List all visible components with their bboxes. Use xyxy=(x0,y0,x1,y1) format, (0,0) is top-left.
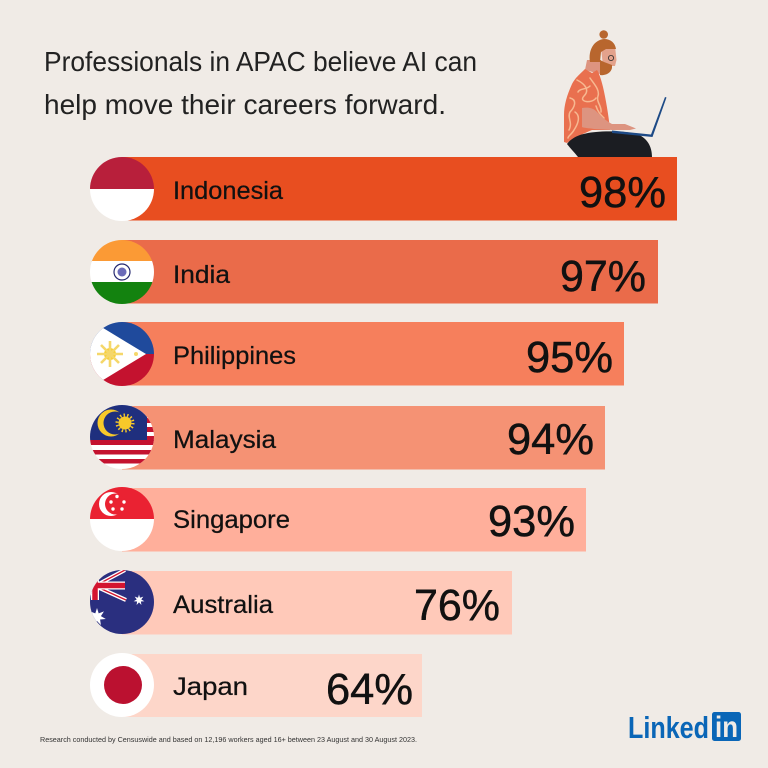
flag: India xyxy=(90,240,154,304)
shirt xyxy=(564,69,610,143)
bar: Australia: Australia xyxy=(173,591,273,619)
bar: Japan: Japan xyxy=(173,673,248,701)
bar: Singapore: 93% xyxy=(488,497,575,546)
legs xyxy=(567,131,652,157)
footnote: Research conducted by Censuswide and based on 12,196 workers aged 16+ between 23 August and 30 August 2023. xyxy=(40,735,417,744)
bar: Japan: 64% xyxy=(326,665,413,714)
bar: Indonesia xyxy=(90,157,677,221)
logo: LinkedIn: in xyxy=(715,711,738,744)
bar: Australia xyxy=(88,570,512,634)
flag: Singapore xyxy=(90,487,154,552)
title: help move their careers forward. xyxy=(44,89,446,120)
hair bun xyxy=(599,30,608,39)
bar: Philippines: 95% xyxy=(526,333,613,382)
arm xyxy=(582,108,636,130)
bar: India xyxy=(90,240,658,304)
glasses xyxy=(608,55,614,61)
bar: Malaysia: Malaysia xyxy=(173,426,276,454)
bar: India: India xyxy=(173,261,230,289)
laptop xyxy=(612,97,666,137)
shirt pattern xyxy=(568,78,604,138)
bar: Singapore xyxy=(90,487,586,552)
bar: Australia: 76% xyxy=(414,581,500,630)
bar: Philippines xyxy=(90,320,624,388)
bar: Malaysia xyxy=(90,405,605,470)
flag: Indonesia xyxy=(90,157,154,221)
bar: India: 97% xyxy=(560,252,646,301)
neck xyxy=(585,60,601,74)
logo: LinkedIn: Linked xyxy=(628,710,709,745)
bar: Singapore: Singapore xyxy=(173,506,290,534)
flag: Malaysia xyxy=(90,405,155,469)
title: Professionals in APAC believe AI can xyxy=(44,46,477,77)
flag: Australia xyxy=(88,570,154,634)
bar: Philippines: Philippines xyxy=(173,342,296,370)
illustration: person with laptop xyxy=(564,30,666,157)
bar: Malaysia: 94% xyxy=(507,415,594,464)
face xyxy=(601,46,616,66)
bar: Indonesia: Indonesia xyxy=(173,177,283,205)
bar: Indonesia: 98% xyxy=(579,168,666,217)
title xyxy=(44,46,477,120)
flag: Japan xyxy=(90,653,154,717)
hair xyxy=(590,39,616,62)
beard xyxy=(600,60,612,75)
bar: Japan xyxy=(90,653,422,717)
flag: Philippines xyxy=(90,320,154,388)
